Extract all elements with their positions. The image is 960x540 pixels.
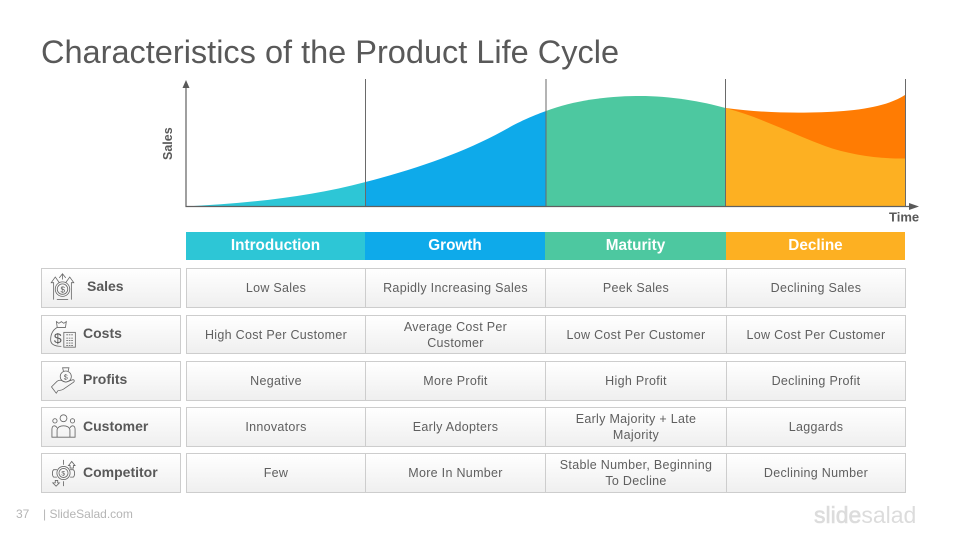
row label: competitor	[41, 453, 181, 493]
title: Characteristics of the Product Life Cycle	[41, 34, 619, 70]
stage header: growth: Growth	[428, 237, 482, 254]
stage header: introduction	[186, 232, 365, 260]
row label: profits	[41, 361, 181, 401]
row cells: competitor: Stable Number, Beginning	[560, 458, 712, 472]
chart: product life cycle curve	[161, 79, 919, 224]
stage header: decline: Decline	[788, 237, 843, 254]
row label: costs: $	[54, 330, 62, 346]
row label: costs: Costs	[83, 325, 122, 341]
row cells: customer: Innovators	[245, 420, 307, 434]
row cells: customer: Laggards	[789, 420, 843, 434]
axis label: sales: Sales	[161, 127, 175, 160]
row cells: sales: Peek Sales	[603, 281, 669, 295]
row cells: customer: Majority	[613, 428, 659, 442]
row cells: profits	[186, 361, 906, 401]
row cells: costs: Low Cost Per Customer	[566, 328, 705, 342]
row cells: profits: High Profit	[605, 374, 667, 388]
stage header: growth	[365, 232, 545, 260]
row cells: competitor: Declining Number	[764, 466, 868, 480]
row label: sales: Sales	[87, 278, 124, 294]
row label: costs	[41, 315, 181, 354]
stage header: introduction: Introduction	[231, 237, 320, 254]
row cells: costs: Customer	[427, 336, 484, 350]
row cells: profits: Declining Profit	[772, 374, 860, 388]
stage dividers	[366, 79, 906, 206]
row cells: customer: Early Adopters	[413, 420, 498, 434]
area: decline upper	[726, 95, 905, 160]
area: decline lower	[726, 108, 905, 206]
row cells: sales: Low Sales	[246, 281, 306, 295]
row cells: costs: High Cost Per Customer	[205, 328, 347, 342]
area: introduction	[186, 182, 366, 206]
row cells: sales	[186, 268, 906, 308]
row cells: profits: Negative	[250, 374, 302, 388]
footer page number: 37	[16, 507, 29, 521]
row cells: profits: More Profit	[423, 374, 488, 388]
row cells: costs	[186, 315, 906, 354]
area: growth	[366, 111, 546, 206]
row cells: costs: Low Cost Per Customer	[746, 328, 885, 342]
stage header: maturity	[545, 232, 726, 260]
row cells: competitor: To Decline	[605, 474, 667, 488]
row label: customer	[41, 407, 181, 447]
stage header: maturity: Maturity	[606, 237, 665, 254]
axis label: time: Time	[889, 210, 919, 224]
row label: competitor: $	[61, 470, 65, 477]
footer source: | SlideSalad.com	[43, 507, 133, 521]
row cells: competitor: Few	[264, 466, 288, 480]
row label: competitor: Competitor	[83, 464, 158, 480]
row cells: competitor: More In Number	[408, 466, 503, 480]
row label: customer: Customer	[83, 418, 148, 434]
row label: sales: $	[60, 285, 65, 294]
row label: profits: Profits	[83, 371, 127, 387]
row cells: costs: Average Cost Per	[404, 320, 507, 334]
row cells: sales: Rapidly Increasing Sales	[383, 281, 528, 295]
row cells: customer: Early Majority + Late	[576, 412, 696, 426]
footer logo: slidesalad	[814, 502, 916, 528]
row label: sales	[41, 268, 181, 308]
row cells: sales: Declining Sales	[771, 281, 861, 295]
row label: profits: $	[64, 374, 68, 382]
axes with arrows	[182, 80, 919, 210]
area: maturity	[546, 96, 726, 206]
stage header: decline	[726, 232, 905, 260]
